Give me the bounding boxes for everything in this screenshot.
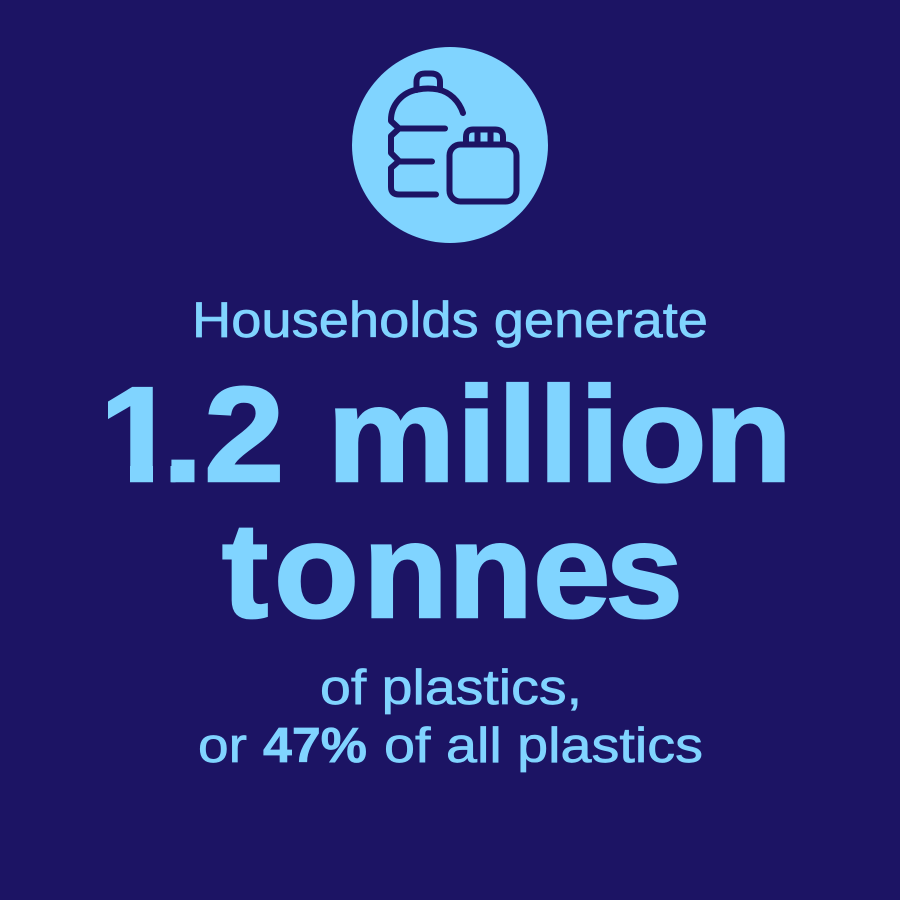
headline unit: tonnes <box>222 496 683 647</box>
icon: bottle <box>391 74 463 194</box>
text: share of all plastics: of all plastics <box>384 719 703 773</box>
icon circle <box>352 47 548 243</box>
heading: intro line: Households generate <box>192 292 708 348</box>
icon: plastic bottle and jar <box>352 47 548 243</box>
text: of plastics: of plastics, <box>320 661 582 715</box>
icon: jar <box>450 130 516 202</box>
text: share of all plastics: or <box>198 719 247 773</box>
headline figure: 1.2 million <box>98 358 792 510</box>
text: share of all plastics: 47% <box>263 719 367 773</box>
text: share of all plastics <box>198 719 703 773</box>
